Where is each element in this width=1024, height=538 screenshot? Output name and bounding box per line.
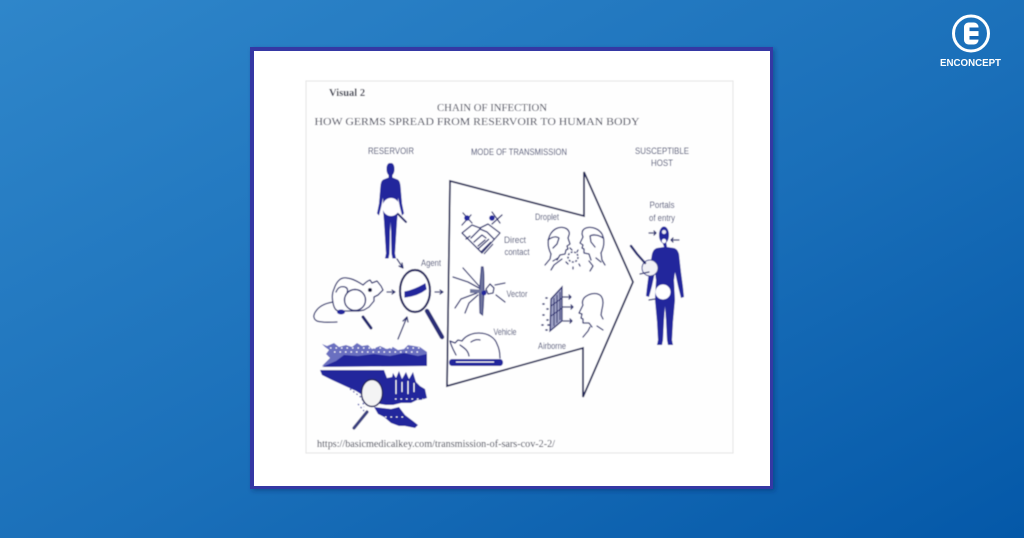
icon: airborne filter and face [542,287,603,337]
icon: rat [314,278,383,328]
arrow: rat to agent [387,290,395,294]
heading: reservoir: RESERVOIR [368,146,414,157]
panel: scanned document [306,81,733,453]
label: Visual 2: Visual 2 [329,88,365,99]
label: portals of entry [649,200,675,223]
arrow: agent to transmission [435,290,443,294]
label: airborne: Airborne [538,341,566,351]
icon: handshake [462,212,502,254]
heading: susceptible host: HOST [651,158,673,169]
arrow: large transmission arrow [447,172,633,397]
label: vehicle: Vehicle [494,327,516,337]
label: portals of entry: Portals [650,200,675,210]
icon: vehicle roast chicken [449,333,503,366]
icon: magnifier with agent [400,270,442,337]
label: droplet: Droplet [535,212,559,222]
label: direct contact [504,235,530,257]
arrow: environment to agent [398,317,408,339]
source link: https://basicmedicalkey.com/transmission-of-sars-cov-2-2/ [317,439,555,450]
logo: Enconcept [940,16,1002,69]
icon: mosquito vector [453,267,505,315]
panel: white card with blue border [250,47,773,489]
label: direct contact: Direct [504,235,526,245]
arrow: portal right [671,238,679,242]
subtitle: HOW GERMS SPREAD FROM RESERVOIR TO HUMAN BODY [314,117,640,128]
label: vector: Vector [506,289,528,299]
heading: susceptible host: SUSCEPTIBLE [635,146,689,157]
arrow: portal left [649,231,656,235]
icon: human reservoir figure [377,163,406,258]
logo: Enconcept: ENCONCEPT [940,57,1002,69]
label: agent: Agent [421,258,441,268]
icon: droplet two faces [545,227,605,271]
heading: susceptible host [635,146,689,169]
arrow: human to agent [397,259,403,268]
icon: environment landscape [320,343,427,428]
label: direct contact: contact [504,247,530,257]
title: CHAIN OF INFECTION [437,103,547,114]
icon: susceptible host figure [631,226,684,345]
heading: mode of transmission: MODE OF TRANSMISSION [471,147,567,158]
label: portals of entry: of entry [649,213,675,223]
